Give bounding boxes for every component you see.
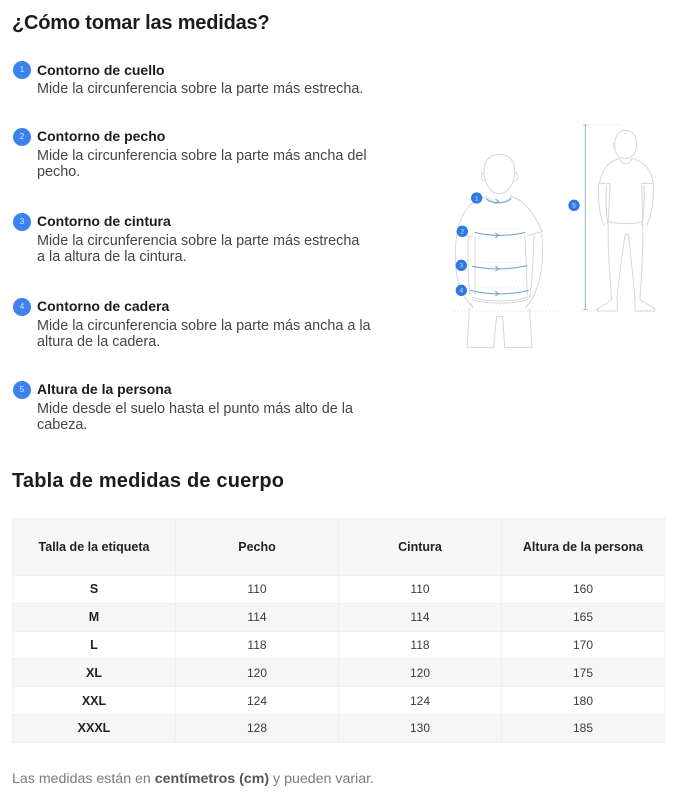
size table: 114 — [410, 610, 430, 624]
size table: XXL — [82, 694, 106, 708]
size table: 170 — [573, 638, 593, 652]
size table: 160 — [573, 582, 593, 596]
step 4: hip: altura de la cadera. — [37, 334, 160, 350]
step 2: chest — [13, 128, 367, 180]
size table: 130 — [410, 721, 430, 735]
size table — [12, 518, 665, 743]
measurement arrows — [470, 198, 529, 296]
step 3: waist: a la altura de la cintura. — [37, 248, 187, 264]
step 3: waist — [13, 213, 360, 264]
size table: 120 — [247, 666, 267, 680]
size table: 118 — [410, 638, 430, 652]
step 4: hip: Contorno de cadera — [37, 298, 169, 314]
step 4: hip — [13, 298, 371, 350]
step 5: height: Altura de la persona — [37, 381, 172, 397]
size table: M — [89, 610, 99, 624]
size table: 165 — [573, 610, 593, 624]
size table: L — [90, 638, 98, 652]
title: how to measure: ¿Cómo tomar las medidas? — [12, 12, 269, 34]
size table: Talla de la etiqueta — [39, 540, 149, 554]
badge numbers: 4 — [459, 288, 463, 295]
heading: size table: Tabla de medidas de cuerpo — [12, 470, 284, 492]
step 4: hip: Mide la circunferencia sobre la parte más ancha a la — [37, 318, 371, 334]
step 1: neck: Contorno de cuello — [37, 62, 165, 78]
badge numbers: 2 — [460, 229, 464, 236]
size table: 118 — [247, 638, 267, 652]
body measurement illustration — [453, 124, 656, 348]
size table: 114 — [247, 610, 267, 624]
step 3: waist: Mide la circunferencia sobre la parte más estrecha — [37, 233, 359, 249]
step 1: neck: 1 — [20, 65, 24, 74]
size table: XXXL — [78, 721, 110, 735]
step 2: chest: 2 — [20, 132, 24, 141]
size table: 110 — [247, 582, 267, 596]
badge numbers — [459, 195, 576, 295]
step 5: height — [13, 381, 353, 432]
step 2: chest: Mide la circunferencia sobre la parte más ancha del — [37, 148, 367, 164]
footnote: Las medidas están en centímetros (cm) y pueden variar. — [12, 771, 374, 787]
size table: 124 — [410, 694, 430, 708]
size table: 124 — [247, 694, 267, 708]
front figure (close-up) — [455, 154, 543, 348]
step 3: waist: 3 — [20, 217, 24, 226]
size table: Altura de la persona — [523, 540, 643, 554]
step 3: waist: Contorno de cintura — [37, 213, 171, 229]
step 1: neck: Mide la circunferencia sobre la parte más estrecha. — [37, 81, 363, 97]
number badges — [456, 192, 580, 296]
size table: 120 — [410, 666, 430, 680]
size table: 185 — [573, 721, 593, 735]
step 2: chest: pecho. — [37, 164, 80, 180]
size table: 128 — [247, 721, 267, 735]
side figure (full body) — [597, 130, 655, 311]
step 1: neck — [13, 61, 363, 97]
step 2: chest: Contorno de pecho — [37, 128, 165, 144]
badge numbers: 3 — [459, 263, 463, 270]
size table: 180 — [573, 694, 593, 708]
size table: XL — [86, 666, 102, 680]
badge numbers: 1 — [475, 195, 479, 202]
step 5: height: Mide desde el suelo hasta el punto más alto de la — [37, 401, 353, 417]
step 5: height: cabeza. — [37, 416, 87, 432]
dotted guide lines — [453, 125, 622, 311]
size table: Cintura — [398, 540, 442, 554]
size table: 110 — [410, 582, 430, 596]
step 4: hip: 4 — [20, 302, 24, 311]
size table: 175 — [573, 666, 593, 680]
badge numbers: 5 — [572, 203, 576, 210]
size table: S — [90, 582, 98, 596]
step 5: height: 5 — [20, 385, 24, 394]
height arrow — [583, 125, 587, 310]
size table: Pecho — [238, 540, 276, 554]
